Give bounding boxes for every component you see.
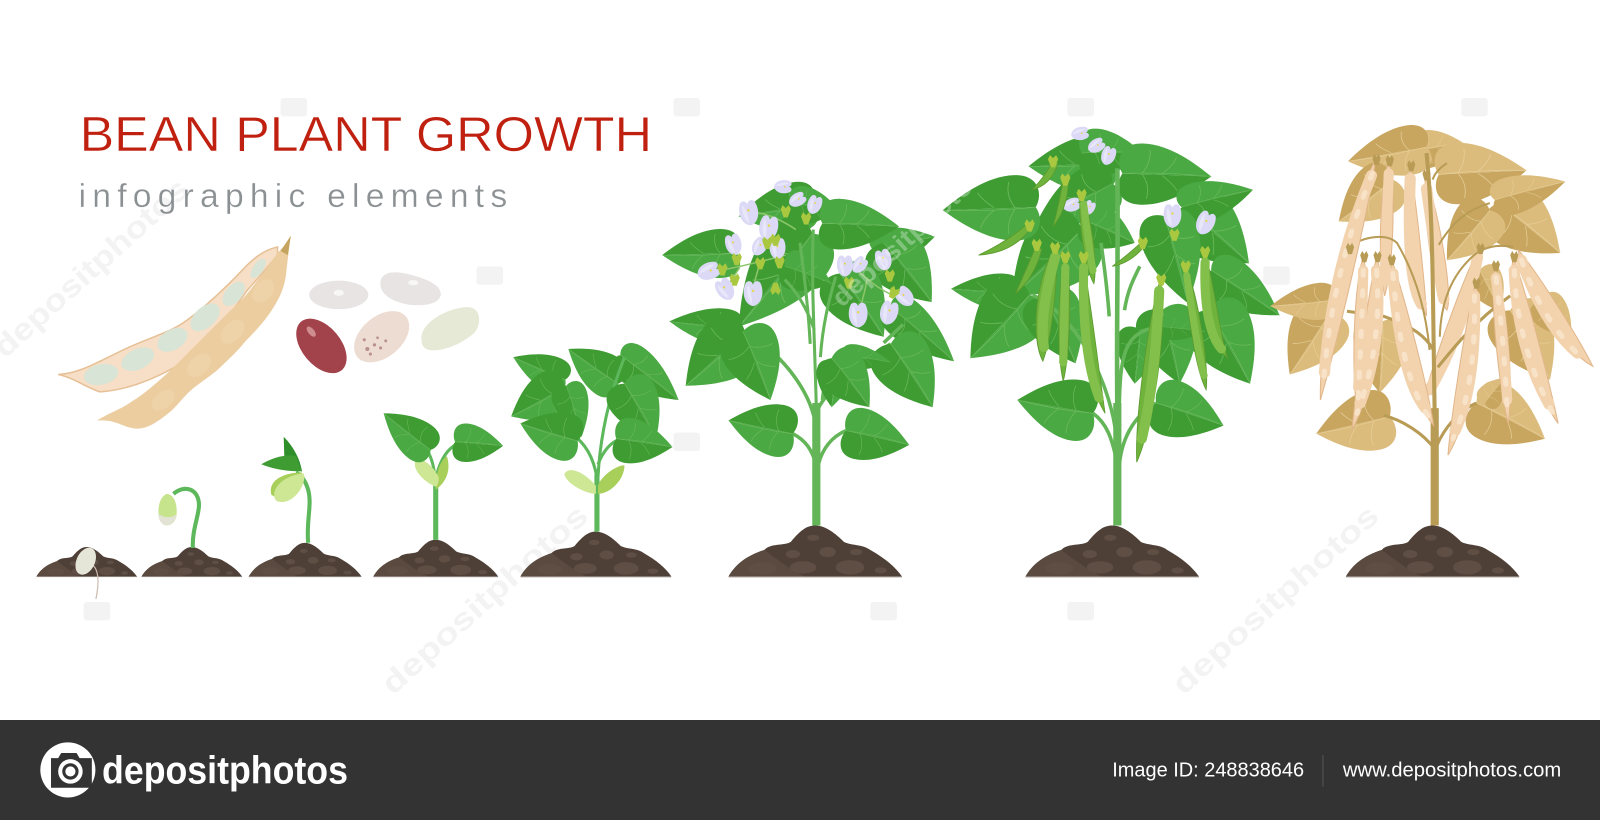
- subtitle: infographic elements: [79, 178, 507, 215]
- back pod bodies: [1385, 173, 1478, 390]
- stage 6: flowering plant: [661, 179, 968, 526]
- back leaves: [942, 129, 1293, 400]
- front pods: [1320, 160, 1593, 455]
- stage 8: dried plant with pods: [1265, 122, 1593, 526]
- front leaves: [664, 306, 958, 470]
- closed bean pod: [97, 236, 291, 429]
- stage 3: seedling: [261, 437, 310, 543]
- watermark over plants: depositphotos: [826, 161, 990, 313]
- watermark: [0, 98, 1488, 701]
- watermark: depositphotos: [1166, 498, 1386, 701]
- pod bean bumps: [1323, 173, 1584, 439]
- depositphotos logo: depositphotos: [102, 750, 348, 793]
- stems: [741, 230, 903, 526]
- title: BEAN PLANT GROWTH: [80, 108, 652, 162]
- watermark: depositphotos: [375, 498, 595, 701]
- image id: Image ID: 248838646: [1112, 760, 1304, 782]
- back leaves: [661, 179, 968, 377]
- front pod bodies: [1324, 176, 1578, 431]
- flower stalks: [714, 212, 903, 311]
- soil mounds: [36, 526, 1519, 578]
- stems: [1347, 153, 1513, 526]
- footer bar: [0, 720, 1600, 820]
- stage 5: plant with leaves: [500, 331, 691, 532]
- open bean pod: [58, 247, 278, 392]
- flowers: [695, 180, 918, 328]
- back leaves: [1265, 122, 1586, 466]
- calyxes: [1024, 155, 1210, 286]
- divider: [1322, 755, 1323, 787]
- pod bodies: [1043, 204, 1221, 439]
- stage 1: germinating seed: [71, 544, 100, 599]
- flowers: [1061, 126, 1218, 238]
- green pods: [979, 161, 1228, 462]
- depositphotos logo: [40, 742, 348, 797]
- stage 7: plant with green pods: [942, 126, 1293, 526]
- website: www.depositphotos.com: [1342, 760, 1561, 782]
- stems: [1033, 168, 1160, 526]
- back pods: [1380, 161, 1480, 400]
- stage 2: sprout: [158, 489, 199, 548]
- stage 4: young plant: [371, 397, 505, 540]
- seeds: [286, 272, 479, 383]
- calyxes: [717, 205, 901, 300]
- front leaves: [1012, 370, 1232, 452]
- calyxes: [1346, 154, 1518, 289]
